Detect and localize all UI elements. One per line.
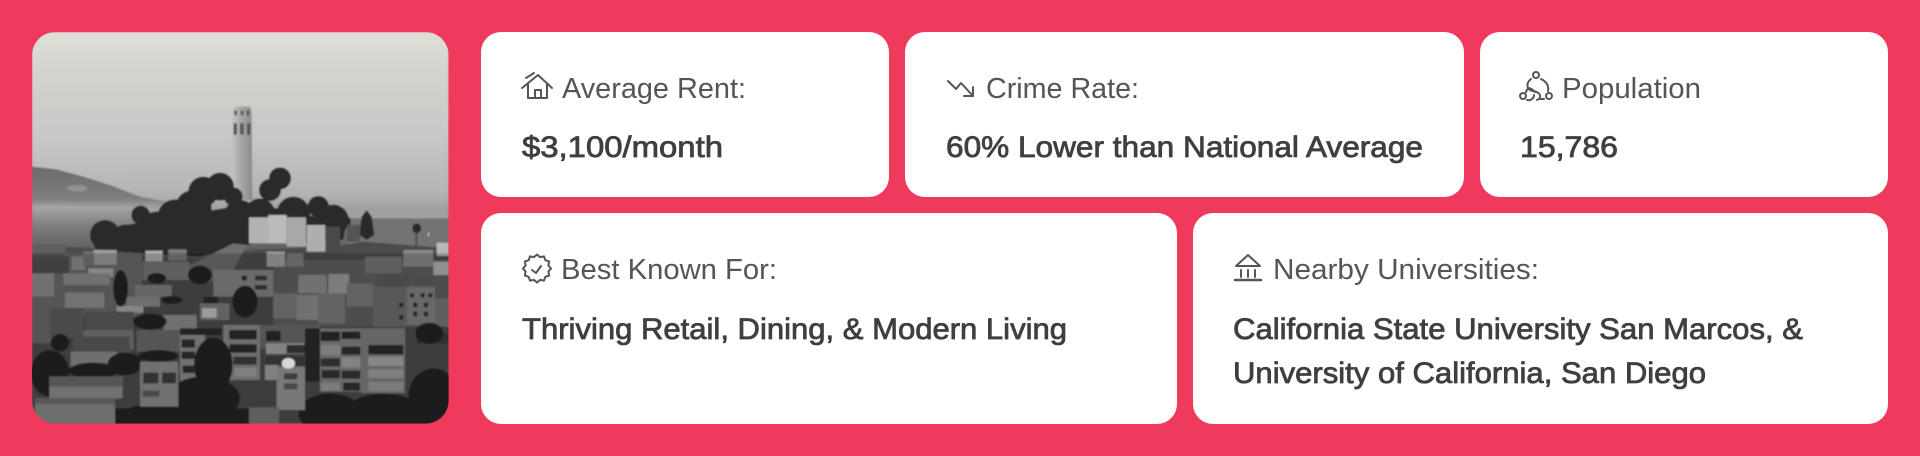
card: nearby universities — [1193, 213, 1888, 424]
icon: university building — [1235, 255, 1261, 280]
value: best known for: Thriving Retail, Dining, & Modern Living — [522, 313, 1067, 346]
dark foreground trees — [31, 266, 458, 433]
value: rent: $3,100/month — [522, 131, 723, 164]
card: population — [1480, 32, 1888, 197]
tone overlay darkening the hillside — [32, 253, 449, 424]
buildings — [32, 215, 449, 393]
icon: trending down — [948, 81, 973, 96]
card: average rent — [481, 32, 889, 197]
tower — [231, 107, 252, 200]
value: universities — [1233, 313, 1803, 390]
hillside base — [32, 242, 449, 424]
card: best known for — [481, 213, 1177, 424]
value: universities: University of California, San Diego — [1233, 357, 1706, 390]
photo: Coit Tower hillside in greyscale — [31, 32, 458, 433]
label: crime rate: Crime Rate: — [986, 73, 1139, 105]
icon: house — [522, 73, 552, 98]
value: population: 15,786 — [1520, 131, 1618, 164]
label: average rent: Average Rent: — [562, 73, 746, 105]
icon: verified badge — [523, 254, 551, 282]
label: nearby universities: Nearby Universities: — [1273, 254, 1539, 286]
label: best known for: Best Known For: — [561, 254, 777, 286]
card: crime rate — [905, 32, 1464, 197]
trees on hilltop — [90, 167, 421, 257]
lower apartment details — [35, 362, 305, 424]
value: crime: 60% Lower than National Average — [946, 131, 1423, 164]
value: universities: California State University San Marcos, & — [1233, 313, 1803, 346]
label: population: Population — [1562, 73, 1701, 105]
icon: people network — [1520, 72, 1552, 100]
